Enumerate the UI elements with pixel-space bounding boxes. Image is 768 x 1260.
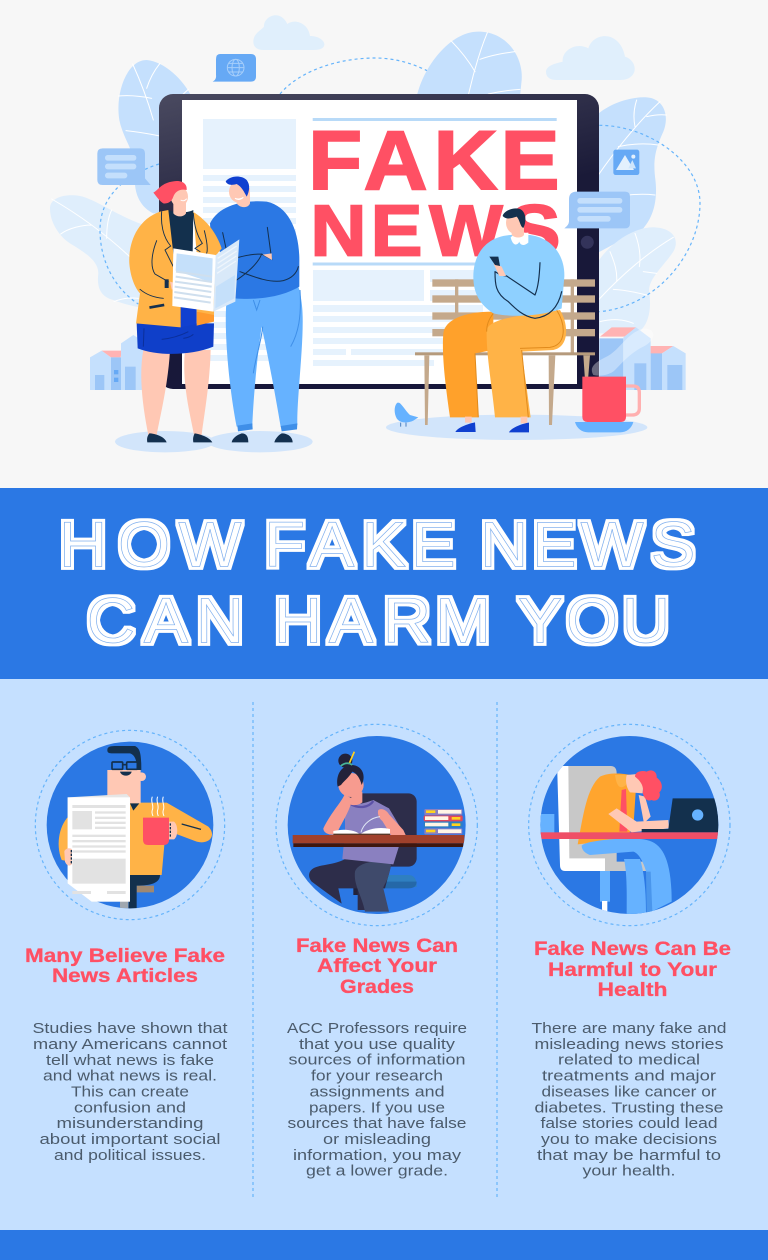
column 1: body text: misunderstanding <box>56 1115 204 1132</box>
title: How Fake News Can Harm You: YOU <box>518 585 670 656</box>
title: How Fake News Can Harm You: CAN <box>87 585 244 656</box>
column 2: body text: or misleading <box>323 1131 431 1148</box>
tablet frame <box>159 94 599 389</box>
hero illustration: right background decorations <box>417 32 700 390</box>
column 2: body text: that you use quality <box>299 1036 456 1053</box>
newspaper rules <box>313 118 558 266</box>
icon: tired person at laptop <box>529 724 730 926</box>
column dividers <box>253 702 497 1197</box>
column 2: body text: get a lower grade. <box>306 1163 448 1180</box>
column 1: body text <box>32 1020 228 1164</box>
column 1: body text: and political issues. <box>54 1147 206 1164</box>
column 3: heading: Harmful to Your <box>548 959 717 981</box>
hero illustration: left background decorations <box>50 15 324 390</box>
column 2: body text: ACC Professors require <box>287 1020 467 1037</box>
column 2: body text: sources of information <box>288 1052 466 1069</box>
column 2: body text: for your research <box>311 1068 443 1085</box>
people: woman and man reading newspaper <box>115 177 313 452</box>
column 3: body text: your health. <box>582 1163 676 1180</box>
column 3: body text: treatments and major <box>542 1068 716 1085</box>
hero background <box>0 0 768 488</box>
tablet camera <box>581 236 594 249</box>
title band <box>0 488 768 679</box>
tablet screen <box>182 100 577 384</box>
content panel <box>0 679 768 1230</box>
column 2: body text: sources that have false <box>288 1115 466 1132</box>
column 2: heading: Grades <box>340 976 414 998</box>
column 3: body text: There are many fake and <box>532 1020 726 1037</box>
column 3: body text: misleading news stories <box>534 1036 724 1053</box>
column 3: body text: false stories could lead <box>540 1115 718 1132</box>
column 1: body text: confusion and <box>74 1099 186 1116</box>
column 2: heading: Affect Your <box>317 955 437 977</box>
column 3: heading: Health <box>598 979 668 1001</box>
title: How Fake News Can Harm You <box>59 509 695 656</box>
column 2: body text: papers. If you use <box>309 1099 445 1116</box>
column 1: body text: Studies have shown that <box>32 1020 228 1037</box>
column 3: body text: diabetes. Trusting these <box>534 1099 724 1116</box>
column 3: heading: Fake News Can Be <box>534 938 731 960</box>
newspaper headline: FAKE <box>308 114 559 208</box>
hero illustration: top connecting dashed arc <box>280 58 461 94</box>
column 3: body text: you to make decisions <box>541 1131 717 1148</box>
icon: man reading newspaper with coffee <box>35 730 225 920</box>
title: How Fake News Can Harm You: HARM <box>274 585 491 656</box>
column 2: body text <box>287 1020 467 1180</box>
title: How Fake News Can Harm You: HOW <box>59 509 242 580</box>
column 1: body text: This can create <box>71 1084 189 1100</box>
newspaper right column blocks <box>313 270 490 366</box>
icon: student studying at desk <box>276 724 477 926</box>
newspaper headline <box>308 114 560 271</box>
column 2: body text: information, you may <box>293 1147 462 1164</box>
newspaper left column blocks <box>203 119 296 361</box>
speech bubble: right <box>564 192 630 228</box>
column 2: body text: assignments and <box>310 1083 444 1100</box>
title: How Fake News Can Harm You: FAKE <box>264 509 456 580</box>
bench, seated man, cup and bird <box>386 208 653 440</box>
bottom band <box>0 1230 768 1260</box>
column 1: heading: News Articles <box>52 965 198 987</box>
title: How Fake News Can Harm You: NEWS <box>480 509 695 580</box>
column 3: body text: related to medical <box>558 1052 700 1069</box>
column 3: body text: diseases like cancer or <box>542 1083 716 1100</box>
column 3: body text: that may be harmful to <box>537 1147 721 1164</box>
column 1: body text: about important social <box>40 1131 220 1148</box>
column 1: body text: many Americans cannot <box>33 1036 228 1053</box>
column 1: body text: tell what news is fake <box>46 1052 214 1069</box>
column 1: body text: and what news is real. <box>43 1068 217 1085</box>
column 3: heading <box>534 938 731 1001</box>
column 3: body text <box>532 1020 726 1180</box>
column 1: heading <box>25 945 225 987</box>
newspaper headline: NEWS <box>310 190 560 271</box>
column 1: heading: Many Believe Fake <box>25 945 225 967</box>
column 2: heading <box>296 935 458 998</box>
column 2: heading: Fake News Can <box>296 935 458 957</box>
